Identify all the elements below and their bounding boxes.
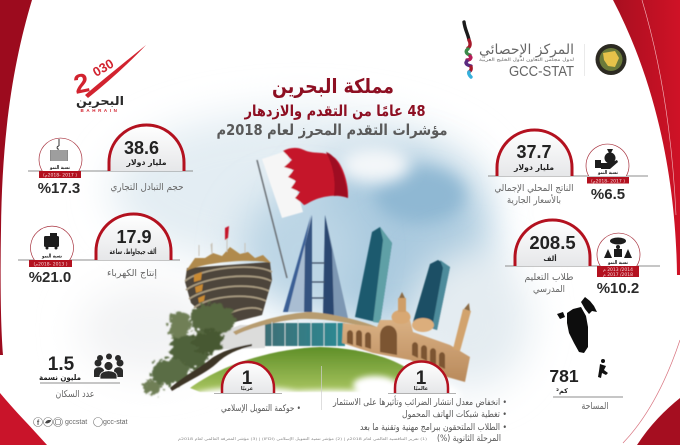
value: 781 <box>549 366 579 386</box>
baseline <box>40 382 120 384</box>
label: عدد السكان <box>56 389 94 400</box>
bottom right curve line <box>623 340 680 443</box>
value: 38.6 <box>124 138 159 158</box>
baseline <box>388 392 456 395</box>
value: 1 <box>242 368 253 389</box>
map of Bahrain <box>557 297 597 353</box>
tower flag <box>225 226 229 240</box>
gauge arch <box>395 362 448 393</box>
icon: facebook: f <box>37 420 40 427</box>
title <box>216 74 448 139</box>
glass pavilion <box>203 312 377 350</box>
growth label: نسبة النمو <box>607 260 628 266</box>
logo digits 030: 030 <box>90 56 116 80</box>
gauge arch <box>96 214 171 260</box>
label line 2: بالأسعار الجارية <box>507 194 561 206</box>
value: 1 <box>416 368 427 389</box>
label line 1: طلاب التعليم <box>524 272 574 283</box>
growth value: %17.3 <box>38 180 80 197</box>
icon: linkedin style circle <box>94 418 102 426</box>
icon: twitter <box>44 418 52 426</box>
growth circle <box>586 144 629 176</box>
bottom right red corner <box>637 398 680 445</box>
bullet 1: • انخفاض معدل انتشار الضرائب وتأثيرها على الاستثمار <box>332 395 507 408</box>
panel: population <box>39 354 124 400</box>
period text line 1: 2014/ 2013 م <box>603 267 634 272</box>
unit: مليون نسمة <box>39 373 81 382</box>
handle gcc-stat: gcc-stat <box>103 419 128 426</box>
icon: GCC-STAT ribbon <box>464 22 471 77</box>
icon: instagram <box>54 418 62 426</box>
divider between rank panels <box>320 366 323 410</box>
logo arabic name: المركز الإحصائي <box>479 42 574 58</box>
growth circle <box>39 138 82 171</box>
baseline <box>488 176 648 177</box>
panel: GDP <box>488 130 648 206</box>
right band highlight line <box>642 0 676 215</box>
label line 1: الناتج المحلي الإجمالي <box>494 183 574 194</box>
growth circle <box>597 233 640 266</box>
gauge arch <box>109 125 184 171</box>
period text: ( 2017 -2018م) <box>43 172 77 178</box>
icon: people group <box>94 354 124 379</box>
Financial Harbour tower 1 <box>355 227 392 323</box>
panel: school students <box>505 220 660 297</box>
icon: runner <box>598 359 608 378</box>
unit: ألف جيجاواط. ساعة <box>110 247 156 256</box>
baseline <box>214 392 282 395</box>
growth value: %10.2 <box>597 280 639 297</box>
panel: trade volume <box>28 125 193 197</box>
baseline <box>505 266 660 267</box>
growth label: نسبة النمو <box>49 165 70 171</box>
bottom left red corner <box>0 393 47 445</box>
bullet 3: • الطلاب الملتحقون ببرامج مهنية وتقنية ما بعد <box>360 423 507 433</box>
growth circle <box>31 226 74 260</box>
baseline <box>18 260 180 261</box>
Sakhir tower <box>185 226 272 322</box>
label: المساحة <box>582 401 608 412</box>
Bahrain World Trade Center <box>283 215 348 318</box>
bullet text: • حوكمة التمويل الإسلامي <box>221 404 301 414</box>
title line 2: 48 عامًا من التقدم والازدهار <box>244 102 426 120</box>
footnote sources: (1) تقرير التنافسية العالمي لعام 2018م | (2) مؤشر تنمية التمويل الإسلامي (IFDI) | (3) مؤشر المعرفة العالمي لعام 2018م <box>178 436 428 442</box>
icon: container on crane <box>50 139 68 161</box>
panel: global rank <box>332 362 507 444</box>
growth label: نسبة النمو <box>597 170 618 176</box>
growth label: نسبة النمو <box>41 254 62 260</box>
bullet 2: • تغطية شبكات الهاتف المحمول <box>402 410 507 420</box>
tree <box>143 303 252 395</box>
value: 1.5 <box>48 354 75 375</box>
flag of Bahrain <box>262 148 348 218</box>
baseline <box>553 396 623 398</box>
logo latin country: BAHRAIN <box>81 108 119 113</box>
panel: Arab rank <box>214 362 301 414</box>
logo latin name: GCC-STAT <box>509 64 574 80</box>
panel: electricity <box>18 214 180 286</box>
period tag <box>597 266 639 277</box>
logo digit two: 2 <box>71 67 92 100</box>
mosque <box>342 292 471 382</box>
logo swoosh <box>85 45 146 98</box>
growth value: %6.5 <box>591 186 625 203</box>
logo arabic subtitle: لدول مجلس التعاون لدول الخليج العربية <box>479 58 574 63</box>
handle gccstat: gccstat <box>65 419 87 426</box>
flag pole <box>257 160 287 278</box>
period tag <box>29 260 72 267</box>
social media handles <box>34 418 128 427</box>
title line 3: مؤشرات التقدم المحرز لعام 2018م <box>216 121 448 139</box>
growth value: %21.0 <box>29 269 71 286</box>
unit: مليار دولار <box>513 163 554 172</box>
label: حجم التبادل التجاري <box>110 182 184 193</box>
icon: students and teacher <box>604 238 632 258</box>
central illustration <box>143 148 471 426</box>
title line 1: مملكة البحرين <box>272 74 394 98</box>
divider <box>583 44 586 76</box>
gauge arch <box>515 220 590 266</box>
value: 208.5 <box>529 232 576 253</box>
unit: كم² <box>556 387 568 395</box>
label: إنتاج الكهرباء <box>107 268 157 279</box>
value: 37.7 <box>516 142 552 162</box>
unit: عربيًا <box>241 385 253 392</box>
bullet 3 continued: المرحلة الثانوية (%) <box>437 434 501 444</box>
logo: GCC-STAT <box>464 22 626 80</box>
unit: ألف <box>543 254 557 263</box>
period text: ( 2017 -2018م) <box>591 178 625 184</box>
period text: ( 2013 -2018م) <box>34 262 68 266</box>
logo: Bahrain 2030 <box>71 45 146 113</box>
icon: hand with money bag <box>595 149 618 169</box>
label line 2: المدرسي <box>533 284 565 295</box>
period tag <box>39 171 81 178</box>
green lawn <box>190 347 412 392</box>
right red band <box>613 0 680 275</box>
sky and clouds backdrop <box>80 110 530 390</box>
gauge arch <box>497 130 572 176</box>
unit: مليار دولار <box>126 158 167 167</box>
gauge arch <box>222 362 274 393</box>
white clouds below lawn <box>190 376 460 426</box>
Financial Harbour tower 2 <box>413 260 450 330</box>
panel: area <box>549 297 623 412</box>
period tag <box>587 177 629 184</box>
baseline <box>28 170 193 172</box>
icon: GCC emblem <box>596 44 626 75</box>
logo arabic country: البحرين <box>76 94 124 108</box>
period text line 2: 2018/ 2017 م <box>603 272 634 277</box>
unit: عالميًا <box>414 385 428 392</box>
value: 17.9 <box>116 227 152 247</box>
left red band <box>0 0 32 355</box>
icon: generator <box>44 233 59 250</box>
